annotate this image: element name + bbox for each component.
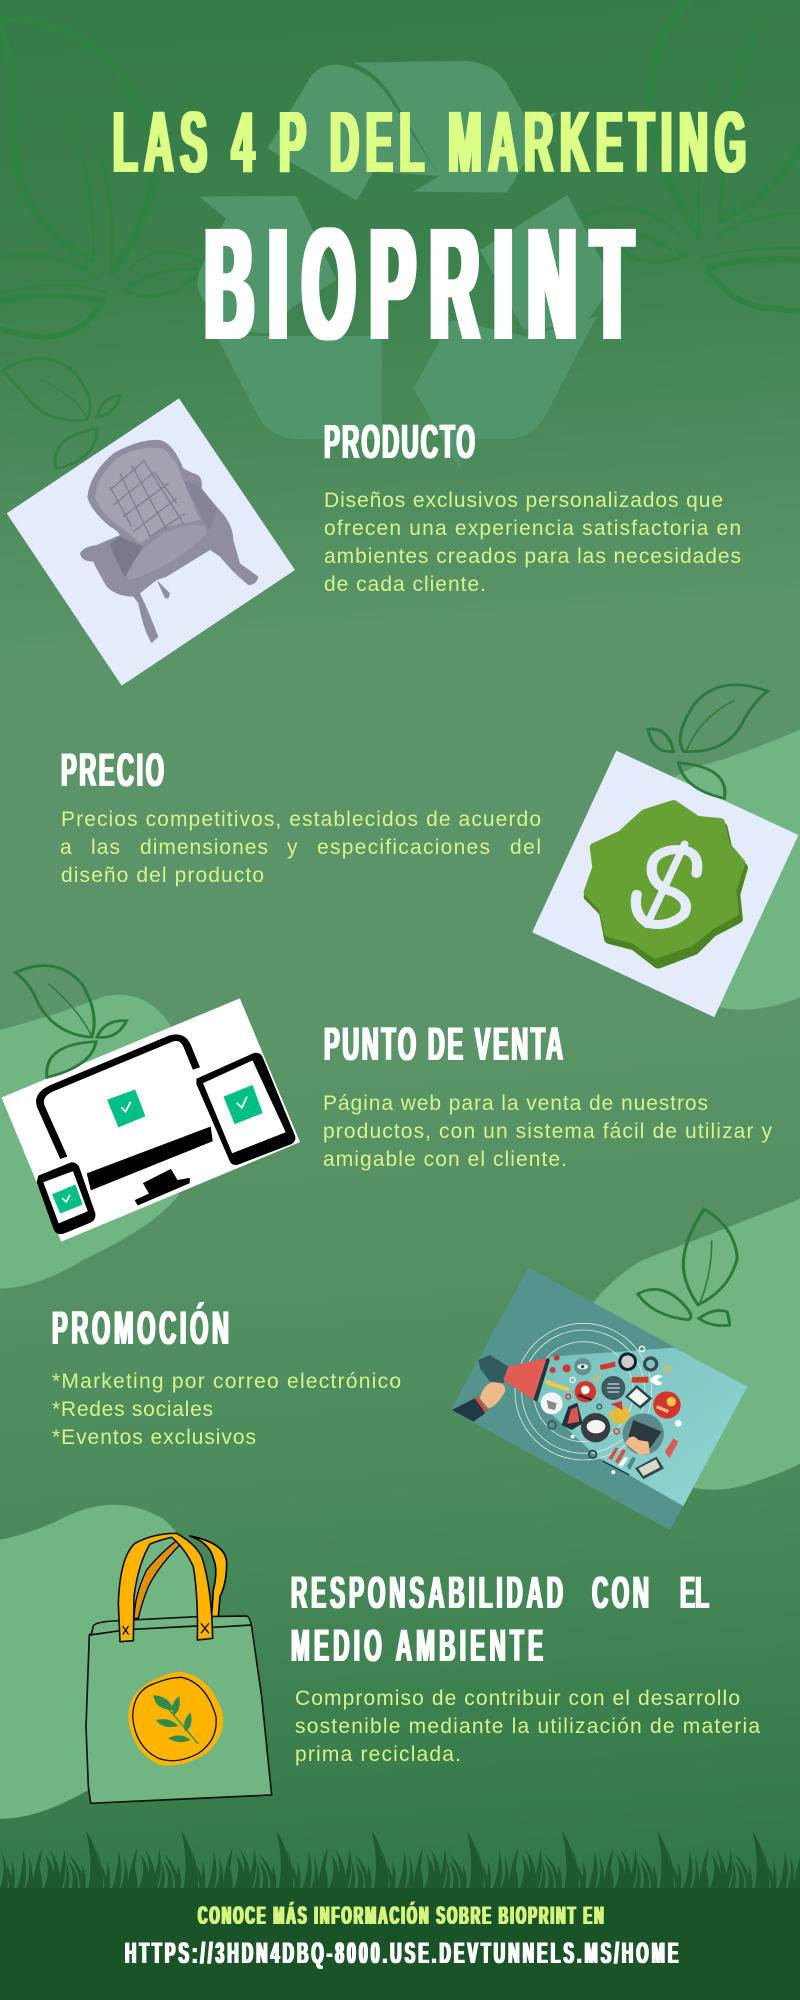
text: producto description	[324, 489, 741, 596]
text: punto de venta description: Página web para la venta de nuestros	[323, 1092, 708, 1115]
text: precio description: las	[91, 836, 120, 859]
text: producto description: Diseños exclusivos personalizados que	[324, 489, 723, 512]
panel: responsabilidad con el medio ambiente	[86, 1533, 760, 1803]
text: precio description: del	[510, 836, 541, 859]
image: tote bag with leaf badge	[86, 1533, 272, 1803]
panel: punto de venta	[2, 966, 773, 1242]
blob left responsabilidad	[0, 1505, 199, 1819]
decorative leaves top right	[580, 0, 800, 311]
text: responsabilidad description: Compromiso de contribuir con el desarrollo	[295, 1687, 740, 1710]
icon: leaves above devices	[15, 966, 127, 1077]
title: las 4 p del marketing: LAS 4 P DEL MARKETING	[113, 95, 746, 191]
icon: leaves above megaphone	[638, 1209, 737, 1326]
blob right precio	[587, 727, 800, 1010]
icon: leaves above dollar badge	[648, 685, 768, 798]
decorative small leaf left	[3, 358, 120, 469]
recycling symbol	[198, 61, 607, 470]
text: punto de venta description	[323, 1092, 772, 1171]
blob left punto de venta	[0, 995, 179, 1289]
text: responsabilidad description	[295, 1687, 760, 1766]
grass strip	[0, 1831, 800, 1889]
text: responsabilidad description: prima reciclada.	[295, 1743, 461, 1766]
decorative leaves top left	[0, 18, 203, 337]
footer text: conoce mas informacion: CONOCE MÁS INFORMACIÓN SOBRE BIOPRINT EN	[198, 1900, 604, 1930]
text: punto de venta description: amigable con el cliente.	[323, 1148, 567, 1171]
image: chair on pale card	[7, 398, 295, 686]
heading: precio: PRECIO	[61, 743, 164, 796]
text: responsabilidad description: sostenible mediante la utilización de materia	[295, 1715, 760, 1738]
text: punto de venta description: productos, con un sistema fácil de utilizar y	[323, 1120, 772, 1143]
panel: producto	[7, 398, 741, 686]
panel: promocion	[52, 1209, 747, 1530]
text: precio description: Precios competitivos, establecidos de acuerdo	[61, 808, 541, 831]
text: precio description: dimensiones	[140, 836, 268, 859]
text: precio description: diseño del producto	[61, 864, 264, 887]
image: dollar badge on pale card	[532, 751, 798, 1017]
footer text: url: HTTPS://3HDN4DBQ-8000.USE.DEVTUNNELS.MS/HOME	[125, 1937, 678, 1971]
heading: punto de venta: PUNTO DE VENTA	[324, 1017, 563, 1070]
panel: precio	[60, 685, 798, 1017]
blob right promocion	[592, 1196, 800, 1490]
footer band	[0, 1888, 800, 2000]
image: responsive devices on white card	[2, 998, 300, 1242]
heading: responsabilidad con el	[291, 1568, 709, 1671]
image: megaphone with marketing icons	[451, 1267, 747, 1530]
text: promocion list: *Eventos exclusivos	[52, 1426, 256, 1449]
heading: producto: PRODUCTO	[324, 416, 475, 469]
text: precio description: especificaciones	[317, 836, 490, 859]
text: producto description: ofrecen una experiencia satisfactoria en	[324, 517, 741, 540]
heading: responsabilidad con el: EL	[680, 1568, 709, 1618]
heading: responsabilidad con el: RESPONSABILIDAD	[291, 1568, 563, 1618]
text: producto description: de cada cliente.	[324, 573, 486, 596]
text: precio description: a	[60, 836, 72, 859]
text: precio description: y	[287, 836, 298, 859]
title: bioprint: BIOPRINT	[205, 196, 633, 374]
heading: responsabilidad con el: CON	[592, 1568, 649, 1618]
text: promocion list: *Marketing por correo electrónico	[52, 1370, 401, 1393]
text: promocion list	[52, 1370, 401, 1449]
text: precio description	[60, 808, 541, 887]
text: promocion list: *Redes sociales	[52, 1398, 213, 1421]
heading: responsabilidad con el: MEDIO AMBIENTE	[291, 1621, 543, 1671]
text: producto description: ambientes creados para las necesidades	[324, 545, 741, 568]
heading: promocion: PROMOCIÓN	[52, 1301, 229, 1354]
